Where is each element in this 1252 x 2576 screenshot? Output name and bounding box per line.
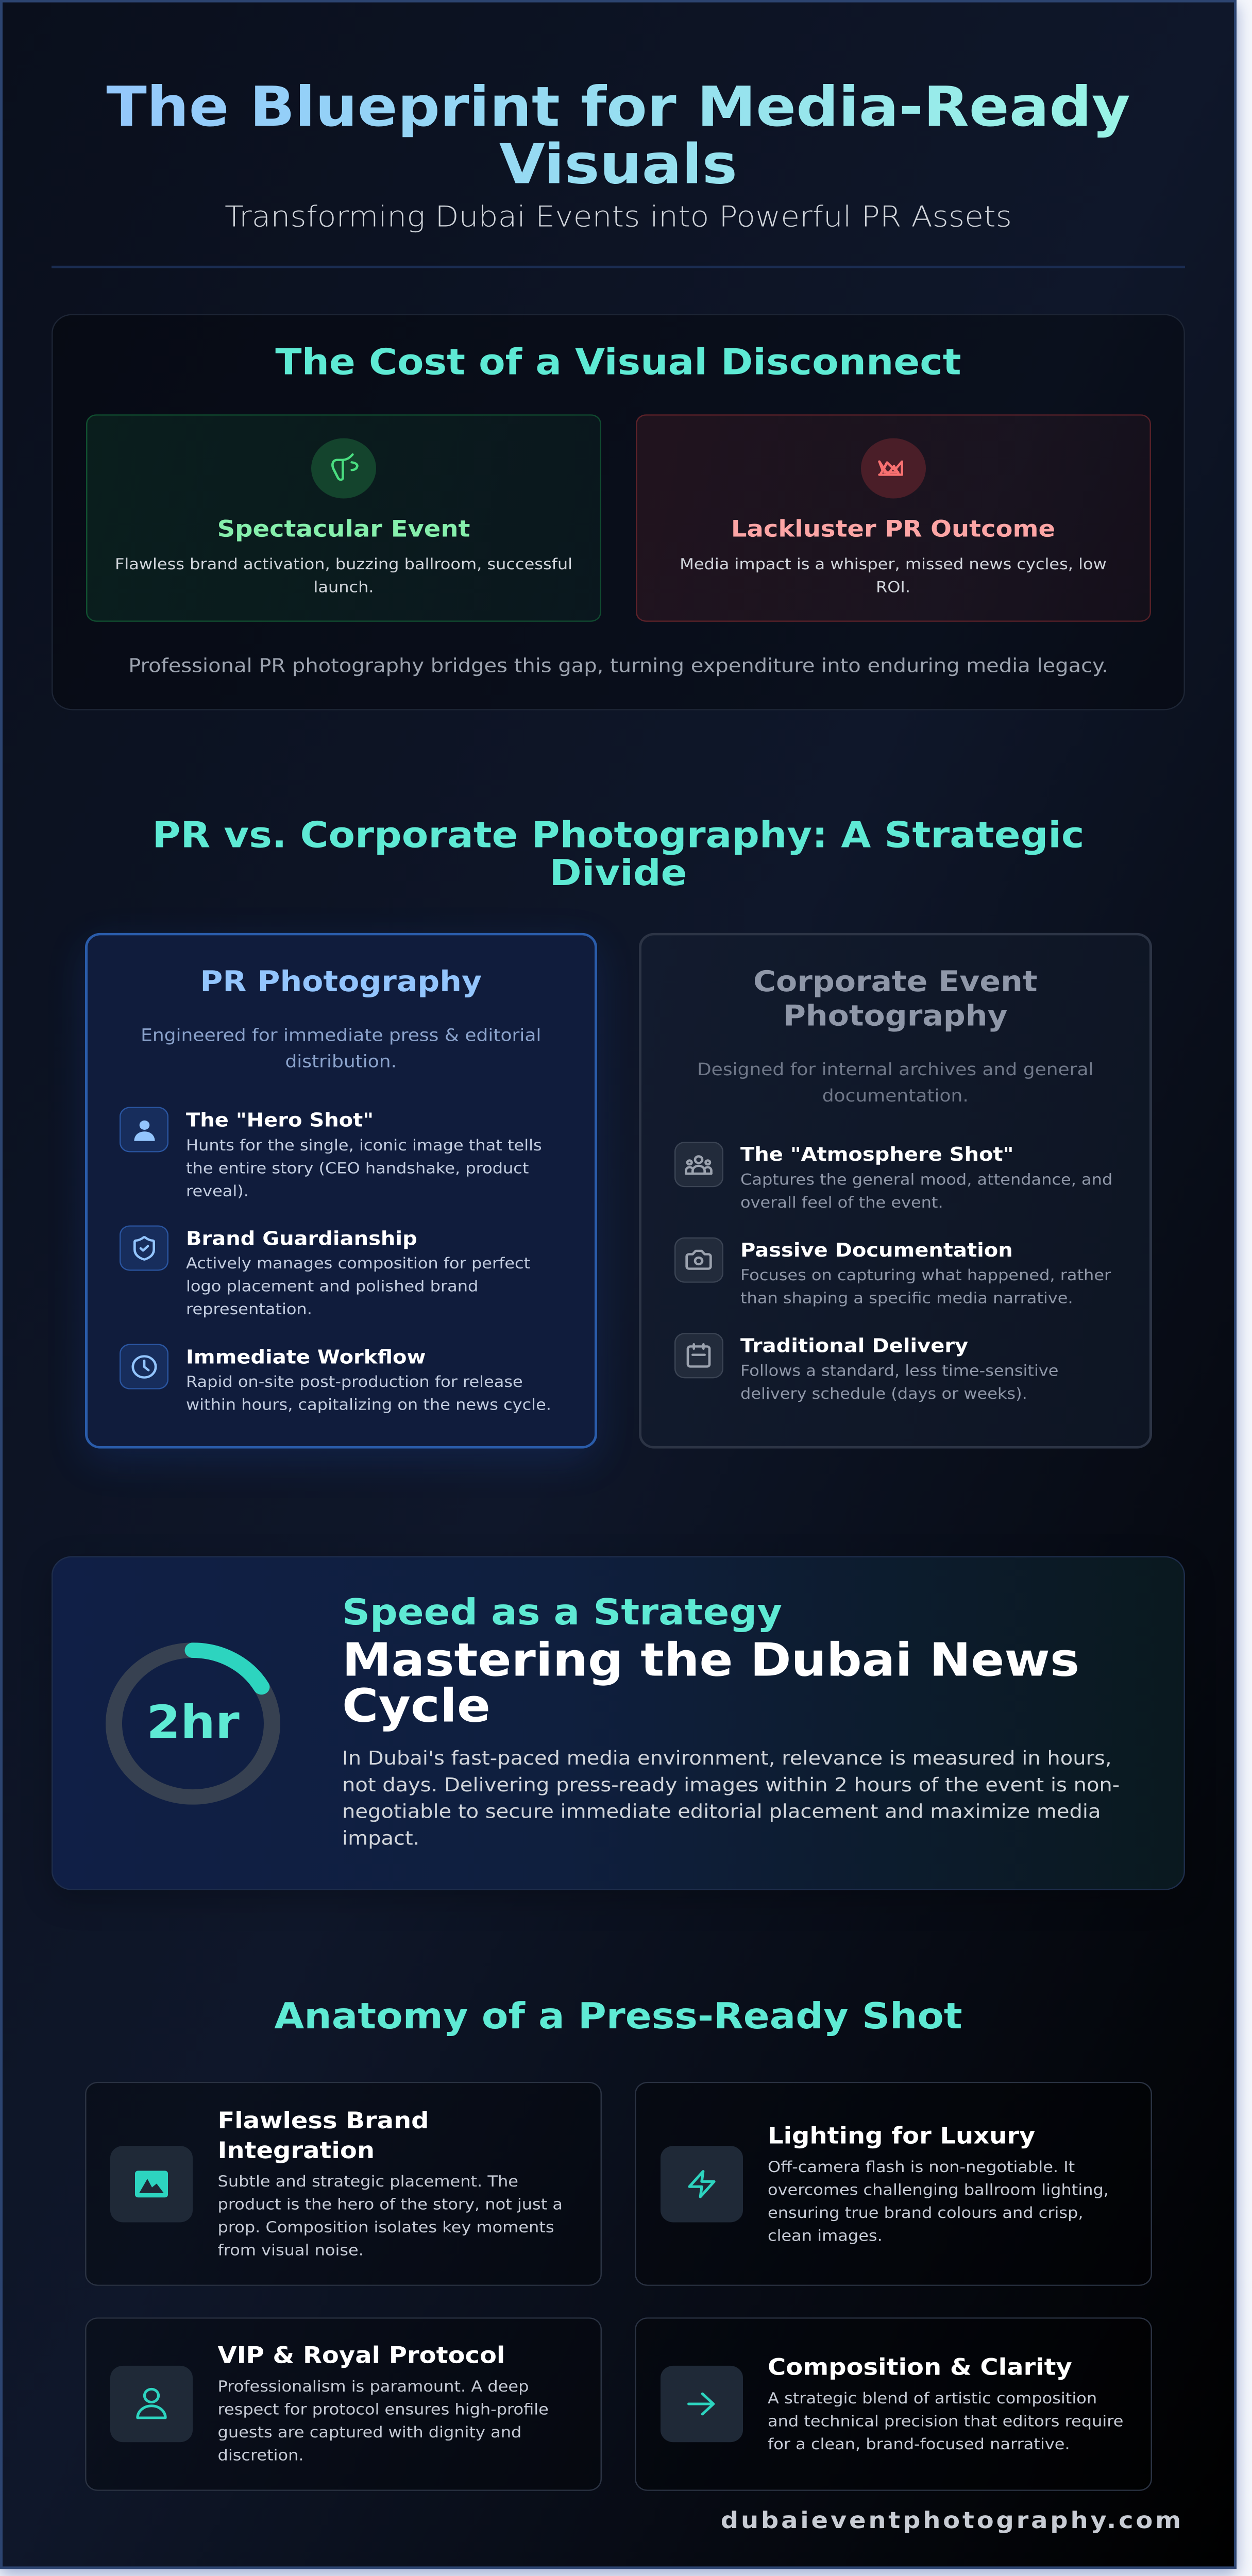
item: immediate workflow [120, 1344, 563, 1416]
item: atmosphere shot [674, 1142, 1117, 1214]
heading: corporate event photography [639, 964, 1152, 1033]
card: vip and royal protocol [84, 2317, 602, 2490]
panel: speed as a strategy [52, 1556, 1185, 1890]
text: speed description: not days. Delivering press-ready images within 2 hours of the event is non- [342, 1774, 1120, 1796]
chart: 2hr progress ring [106, 1642, 280, 1805]
text: atmosphere shot description: overall feel of the event. [740, 1193, 943, 1212]
label: passive documentation: Passive Documentation [740, 1239, 1013, 1261]
label: flawless brand integration [217, 2106, 429, 2166]
icon: group of people [674, 1142, 723, 1187]
icon: image [110, 2146, 193, 2223]
icon: calendar [674, 1333, 723, 1378]
text: speed description: impact. [342, 1827, 419, 1850]
text: lackluster description: Media impact is a whisper, missed news cycles, low [680, 555, 1107, 573]
text: flawless brand integration description: product is the hero of the story, not just a [217, 2195, 563, 2213]
text: lackluster description [680, 555, 1107, 596]
text: corporate intro: documentation. [822, 1087, 969, 1106]
text: flawless brand integration description: from visual noise. [217, 2241, 364, 2259]
text: vip protocol description: guests are captured with dignity and [217, 2423, 521, 2441]
heading: pr vs corporate photography: Divide [549, 852, 687, 893]
text: vip protocol description [217, 2375, 549, 2466]
text: traditional delivery description: delivery schedule (days or weeks). [740, 1384, 1027, 1403]
card: lighting for luxury [635, 2082, 1152, 2286]
text: vip protocol description: respect for protocol ensures high-profile [217, 2400, 549, 2418]
text: bridging statement: Professional PR photography bridges this gap, turning expenditure into enduring media legacy. [128, 655, 1108, 677]
label: flawless brand integration: Integration [217, 2137, 375, 2164]
text: spectacular event description [115, 555, 572, 596]
label: immediate workflow: Immediate Workflow [186, 1346, 426, 1368]
text: pr photography intro: Engineered for immediate press & editorial [141, 1026, 541, 1045]
label: atmosphere shot: The "Atmosphere Shot" [740, 1144, 1013, 1166]
heading: mastering the dubai news cycle [342, 1637, 1079, 1728]
text: traditional delivery description [740, 1359, 1058, 1405]
text: vip protocol description: discretion. [217, 2446, 304, 2464]
text: pr photography intro: distribution. [285, 1052, 397, 1072]
text: flawless brand integration description: prop. Composition isolates key moments [217, 2218, 554, 2236]
text: composition description: and technical precision that editors require [768, 2412, 1123, 2430]
text: lighting description: ensuring true brand colours and crisp, [768, 2204, 1084, 2222]
text: immediate workflow description [186, 1370, 551, 1416]
label: vip and royal protocol: VIP & Royal Protocol [217, 2342, 505, 2368]
text: speed description: In Dubai's fast-paced media environment, relevance is measured in hours, [342, 1747, 1112, 1769]
card: composition and clarity [635, 2317, 1152, 2490]
text: passive documentation description [740, 1264, 1111, 1310]
heading: pr vs corporate photography: PR vs. Corporate Photography: A Strategic [153, 814, 1084, 856]
heading: corporate event photography: Corporate Event [753, 965, 1038, 998]
panel: the cost of a visual disconnect [52, 314, 1185, 710]
text: lighting description: Off-camera flash is non-negotiable. It [768, 2158, 1075, 2176]
label: hero shot: The "Hero Shot" [186, 1109, 374, 1131]
heading: cost of a visual disconnect: The Cost of a Visual Disconnect [275, 341, 961, 383]
text: hero shot description [186, 1133, 542, 1202]
icon: user [110, 2366, 193, 2442]
icon: arrow right [661, 2366, 743, 2442]
heading: mastering the dubai news cycle: Cycle [342, 1679, 490, 1733]
text: lackluster description: ROI. [876, 578, 910, 596]
text: composition description: A strategic blend of artistic composition [768, 2389, 1097, 2407]
title [52, 78, 1185, 193]
heading: pr photography: PR Photography [200, 965, 482, 998]
heading: mastering the dubai news cycle: Mastering the Dubai News [342, 1633, 1079, 1686]
card: lackluster pr outcome [636, 414, 1151, 622]
text: lighting description: overcomes challenging ballroom lighting, [768, 2181, 1109, 2199]
panel: pr photography [84, 933, 597, 1449]
text: flawless brand integration description: Subtle and strategic placement. The [217, 2172, 518, 2190]
text: brand guardianship description: representation. [186, 1300, 312, 1318]
item: hero shot [120, 1107, 563, 1202]
item: passive documentation [674, 1237, 1117, 1310]
heading: pr vs corporate photography [153, 814, 1084, 893]
subtitle: Transforming Dubai Events into Powerful PR Assets [225, 200, 1012, 233]
item: traditional delivery [674, 1333, 1117, 1405]
item: brand guardianship [120, 1225, 563, 1321]
text: lighting description [768, 2156, 1109, 2247]
text: atmosphere shot description [740, 1168, 1112, 1214]
icon: lightning bolt [661, 2146, 743, 2223]
panel: corporate event photography [639, 933, 1152, 1449]
label: composition and clarity: Composition & Clarity [768, 2354, 1072, 2380]
label: traditional delivery: Traditional Delivery [740, 1335, 968, 1357]
icon: person [120, 1107, 168, 1153]
text: hero shot description: Hunts for the single, iconic image that tells [186, 1136, 542, 1154]
text: hero shot description: the entire story (CEO handshake, product [186, 1159, 529, 1177]
label: brand guardianship: Brand Guardianship [186, 1228, 417, 1250]
icon: shield check [120, 1225, 168, 1271]
icon: camera [674, 1237, 723, 1283]
label: spectacular event: Spectacular Event [217, 516, 470, 543]
text: spectacular event description: launch. [313, 578, 374, 596]
text: brand guardianship description: logo placement and polished brand [186, 1277, 478, 1295]
text: spectacular event description: Flawless brand activation, buzzing ballroom, successful [115, 555, 572, 573]
title: The Blueprint for Media-Ready [106, 75, 1130, 139]
text: lighting description: clean images. [768, 2227, 883, 2245]
heading: anatomy of a press-ready shot: Anatomy of a Press-Ready Shot [274, 1995, 962, 2037]
card: flawless brand integration [84, 2082, 602, 2286]
text: brand guardianship description [186, 1251, 530, 1320]
text: traditional delivery description: Follows a standard, less time-sensitive [740, 1362, 1058, 1380]
text: vip protocol description: Professionalism is paramount. A deep [217, 2377, 529, 2395]
text: immediate workflow description: within hours, capitalizing on the news cycle. [186, 1396, 551, 1414]
text: passive documentation description: Focuses on capturing what happened, rather [740, 1266, 1111, 1284]
stat: 2hr: 2hr [146, 1696, 240, 1749]
text: speed description: negotiable to secure immediate editorial placement and maximize media [342, 1801, 1101, 1823]
text: corporate intro [639, 1057, 1152, 1110]
label: lighting for luxury: Lighting for Luxury [768, 2123, 1035, 2149]
text: flawless brand integration description [217, 2170, 563, 2261]
text: brand guardianship description: Actively manages composition for perfect [186, 1254, 530, 1272]
icon: clock [120, 1344, 168, 1389]
card: spectacular event [86, 414, 601, 622]
heading: speed as a strategy: Speed as a Strategy [342, 1591, 782, 1633]
text: passive documentation description: than shaping a specific media narrative. [740, 1289, 1073, 1307]
label: lackluster pr outcome: Lackluster PR Outcome [731, 516, 1055, 543]
text: corporate intro: Designed for internal archives and general [697, 1060, 1094, 1079]
text: speed description [342, 1745, 1120, 1852]
text: atmosphere shot description: Captures the general mood, attendance, and [740, 1171, 1112, 1189]
icon: broken crown [860, 438, 925, 499]
heading: corporate event photography: Photography [783, 999, 1008, 1032]
text: pr photography intro [141, 1026, 541, 1072]
title: Visuals [499, 132, 737, 196]
text: composition description: for a clean, brand-focused narrative. [768, 2435, 1070, 2453]
text: hero shot description: reveal). [186, 1182, 249, 1200]
icon: megaphone [311, 438, 376, 499]
text: immediate workflow description: Rapid on-site post-production for release [186, 1373, 523, 1391]
text: composition description [768, 2387, 1123, 2455]
footer: website: dubaieventphotography.com [721, 2507, 1183, 2534]
label: flawless brand integration: Flawless Brand [217, 2107, 429, 2134]
